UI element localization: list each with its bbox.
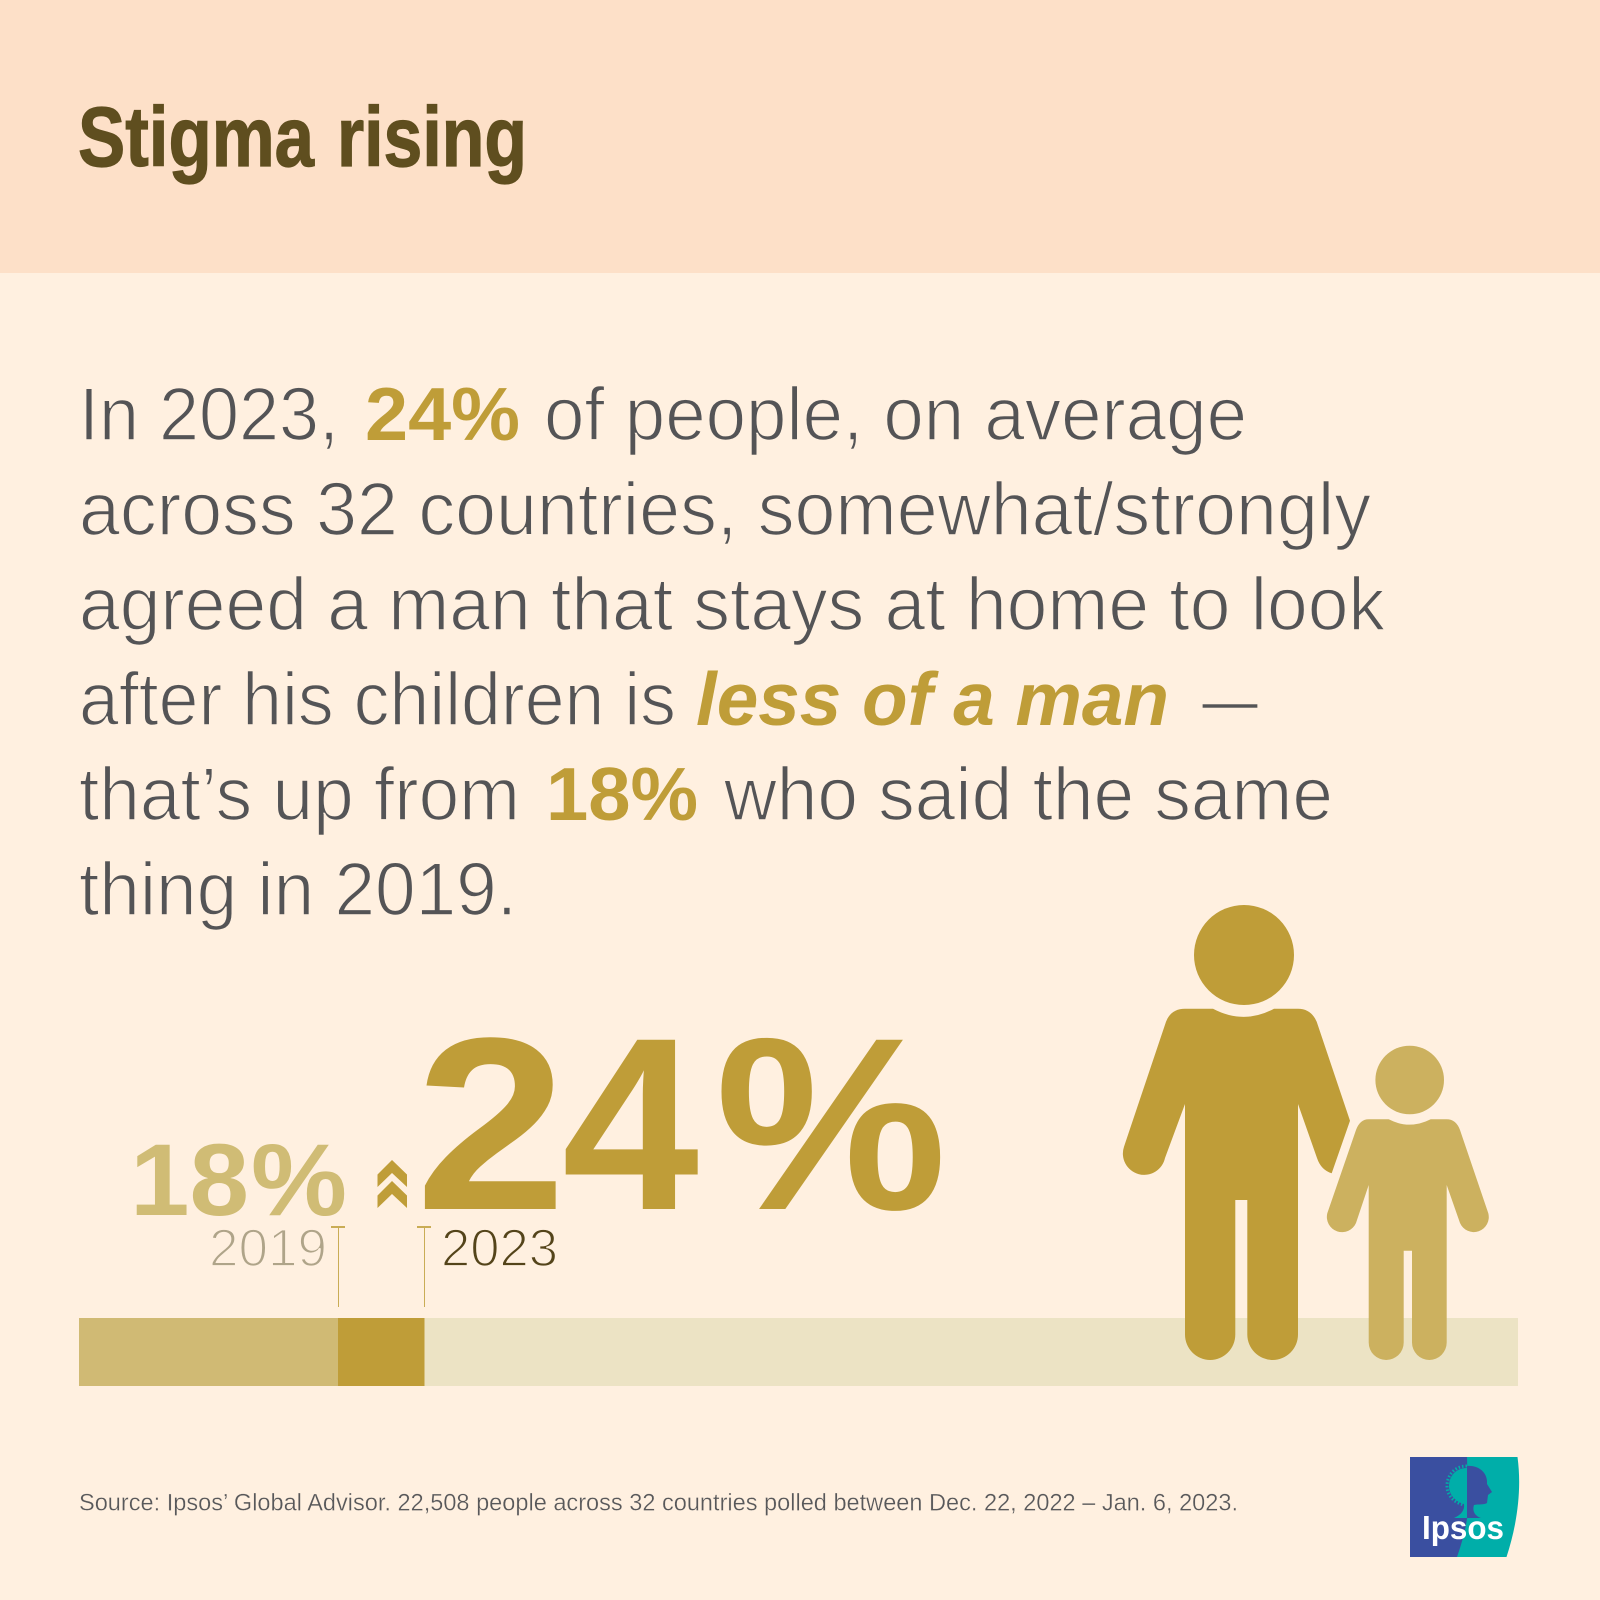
label 2019: 2019 [209,1219,327,1278]
icon: double up chevron [378,1160,407,1208]
24 percent figure: 2 [416,987,566,1262]
18 percent figure: % [251,1123,347,1237]
progress bar [79,1318,1518,1386]
24 percent figure: 4 [562,987,699,1262]
line 5: that’s up from [79,752,520,836]
icon: adult figure [1123,905,1350,1360]
line 2: across 32 countries, somewhat/strongly [79,467,1371,551]
line 5: 18% [546,752,698,836]
line 1: of people, on average [544,372,1247,456]
tick marker 2023 [417,1226,431,1307]
title: Stigma [78,90,315,184]
logo: Ipsos [1410,1457,1519,1557]
title [78,90,527,184]
line 3: agreed a man that stays at home to look [79,562,1385,646]
title: rising [337,90,527,184]
line 4: less of a man [696,657,1169,741]
18 percent figure [130,1123,347,1237]
line 1: 24% [365,372,520,456]
line 1 [79,372,1247,456]
icon: child figure [1327,1046,1489,1360]
source note: Source: Ipsos’ Global Advisor. 22,508 people across 32 countries polled between Dec. 22, 2022 – Jan. 6, 2023. [79,1490,1238,1516]
line 1: In 2023, [79,372,339,456]
line 6: thing in 2019. [79,847,517,931]
body text block [79,372,1385,931]
logo wordmark: Ipsos [1422,1509,1504,1546]
line 4: after his children is [79,657,676,741]
24 percent figure [416,987,947,1262]
header band [0,0,1600,273]
24 percent figure: % [715,987,947,1262]
line 5 [79,752,1333,836]
tick marker 2019 [331,1226,345,1307]
line 4 [79,657,1258,741]
line 5: who said the same [723,752,1333,836]
line 4: — [1202,657,1258,741]
label 2023: 2023 [441,1219,558,1278]
18 percent figure: 18 [130,1123,249,1237]
